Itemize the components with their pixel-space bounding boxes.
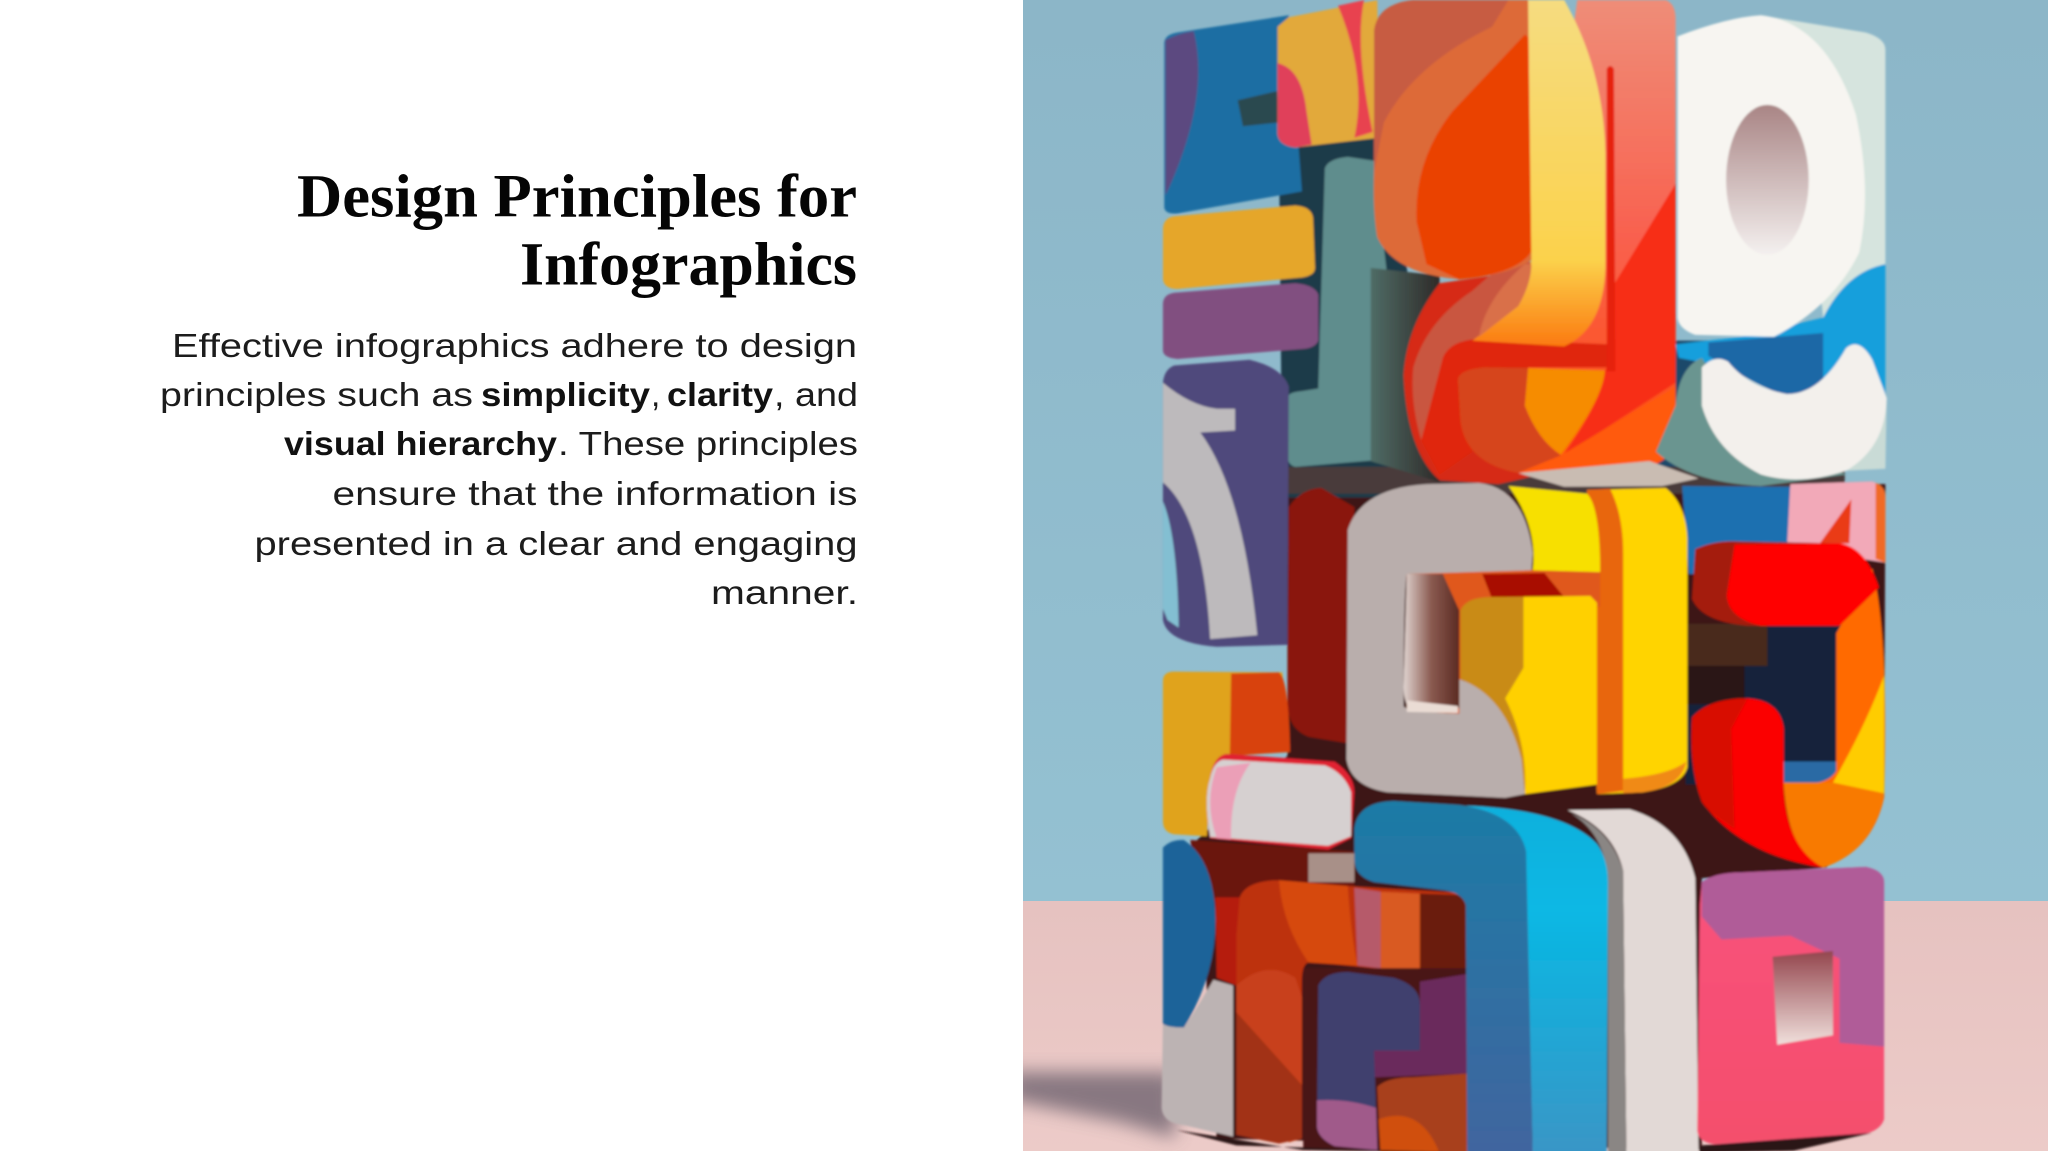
yellow patch <box>1833 675 1884 793</box>
grey green block <box>1656 358 1846 486</box>
upper letters <box>1163 0 1887 744</box>
orange red inside <box>1407 568 1600 714</box>
red band <box>1564 184 1676 455</box>
backdrop wall <box>1023 0 2048 901</box>
title: Infographics <box>520 232 857 298</box>
title: Design Principles for <box>297 164 857 230</box>
yellow bar <box>1163 206 1315 289</box>
yellow top band <box>1508 486 1600 572</box>
body paragraph: . These principles <box>558 426 858 463</box>
white column <box>1567 809 1699 1153</box>
tower interior backing <box>1197 130 1885 1150</box>
purple magenta fill <box>1374 974 1467 1077</box>
dark blue shape <box>1708 333 1823 398</box>
purple grey letter <box>1163 360 1289 647</box>
dark red column <box>1287 488 1354 744</box>
red lower left sweep <box>1404 268 1676 484</box>
navy letter <box>1317 972 1420 1150</box>
body paragraph: , <box>651 377 660 414</box>
body paragraph: ensure that the information is <box>332 476 858 513</box>
yellow right column <box>1587 488 1687 794</box>
blue pink block <box>1682 481 1885 574</box>
grey lower block <box>1162 980 1233 1137</box>
teal shade <box>1371 268 1440 482</box>
pink purple block <box>1697 867 1884 1144</box>
body paragraph: simplicity <box>481 377 650 414</box>
salmon right face <box>1518 0 1676 473</box>
red hook top <box>1692 541 1879 626</box>
body paragraph: Effective infographics adhere to design <box>172 328 857 365</box>
purple bar <box>1163 283 1318 359</box>
orange foot <box>1458 367 1676 473</box>
grey patch <box>1308 853 1354 882</box>
body paragraph: manner. <box>711 575 858 612</box>
blue half <box>1163 840 1215 1028</box>
orange letter <box>1236 880 1472 1144</box>
red under yellow <box>1421 339 1610 475</box>
grey pink block <box>1207 754 1354 850</box>
body paragraph: clarity <box>667 377 773 414</box>
body paragraph: principles such as <box>160 377 473 414</box>
white O letter <box>1678 15 1865 337</box>
yellow red block <box>1278 0 1379 147</box>
body paragraph <box>160 328 858 612</box>
blue wave <box>1676 260 1885 398</box>
base contact shadows <box>1177 1130 1872 1153</box>
title <box>297 164 857 298</box>
white crescent <box>1702 344 1887 479</box>
dark gap <box>1303 968 1467 1150</box>
yellow stripe <box>1472 0 1605 346</box>
grey G letter <box>1346 483 1533 798</box>
blue J <box>1354 801 1533 1153</box>
pale back face <box>1761 15 1885 318</box>
inner yellow letter <box>1461 596 1597 794</box>
floor <box>1023 901 2048 1151</box>
floor shadow <box>1010 1072 1175 1138</box>
blue purple block <box>1164 15 1302 214</box>
dark red back <box>1190 840 1354 902</box>
body paragraph: presented in a clear and engaging <box>254 526 858 563</box>
red edge <box>1215 897 1240 985</box>
lower letters <box>1162 483 1885 1153</box>
plinth highlight <box>1518 461 1699 487</box>
orange band <box>1784 568 1885 868</box>
dark interior of red letter <box>1685 624 1846 785</box>
orange block <box>1163 672 1290 836</box>
teal letter <box>1287 157 1387 467</box>
orange foot lower <box>1377 1073 1467 1153</box>
big orange shape <box>1374 0 1544 279</box>
pale crescent side <box>1846 398 1887 471</box>
body paragraph: visual hierarchy <box>284 426 557 463</box>
inner red line <box>1607 66 1615 371</box>
illustration: colourful 3D block letters <box>1010 0 2048 1153</box>
inner salmon fold <box>1479 264 1531 337</box>
red hook bottom <box>1691 698 1823 868</box>
dark red patch <box>1482 573 1564 599</box>
lower orange <box>1784 783 1884 868</box>
inner salmon sweep <box>1413 260 1538 440</box>
body paragraph: , and <box>774 377 858 414</box>
cyan face <box>1466 806 1608 1153</box>
tower of letters <box>1162 0 1887 1153</box>
